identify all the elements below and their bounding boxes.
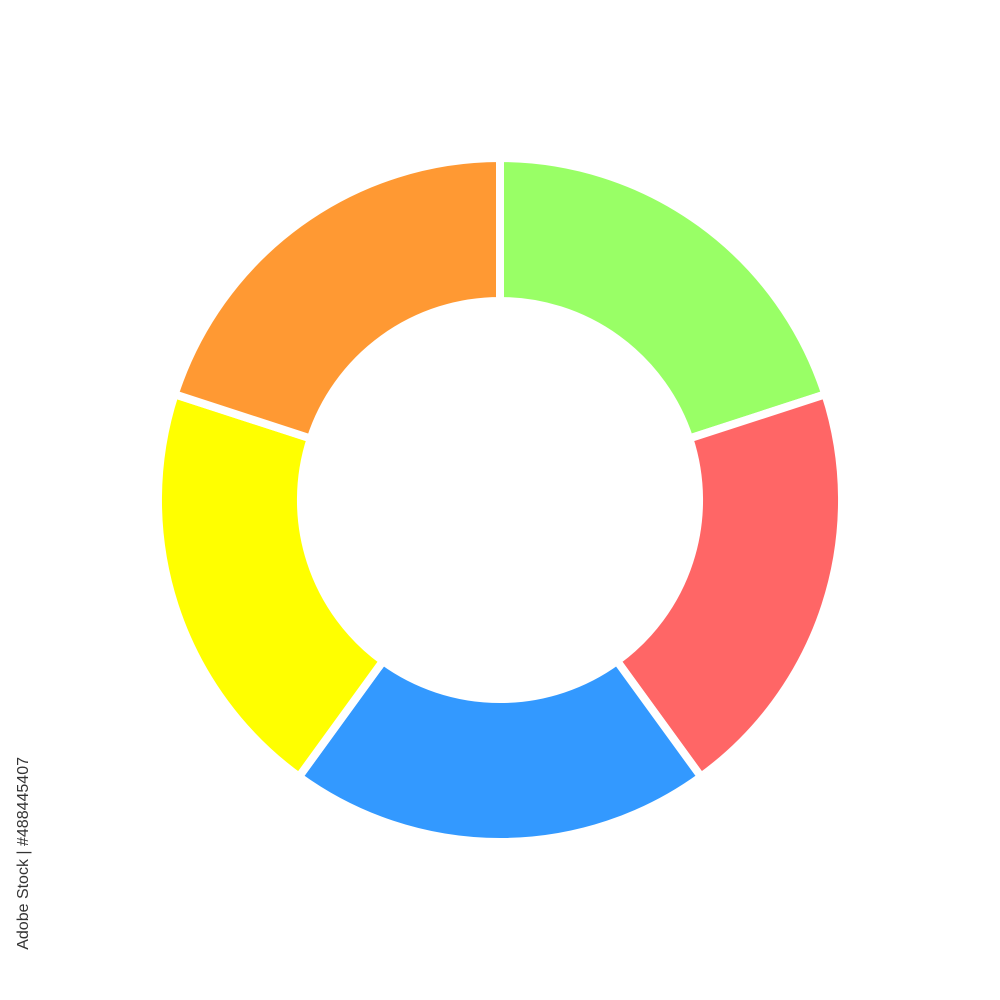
stock id text: Adobe Stock | #488445407 [15,757,32,950]
segment: red [617,394,842,777]
segment: orange [175,158,500,438]
segment: blue [299,661,701,842]
segment: green [500,158,825,438]
segment: yellow [158,394,383,777]
